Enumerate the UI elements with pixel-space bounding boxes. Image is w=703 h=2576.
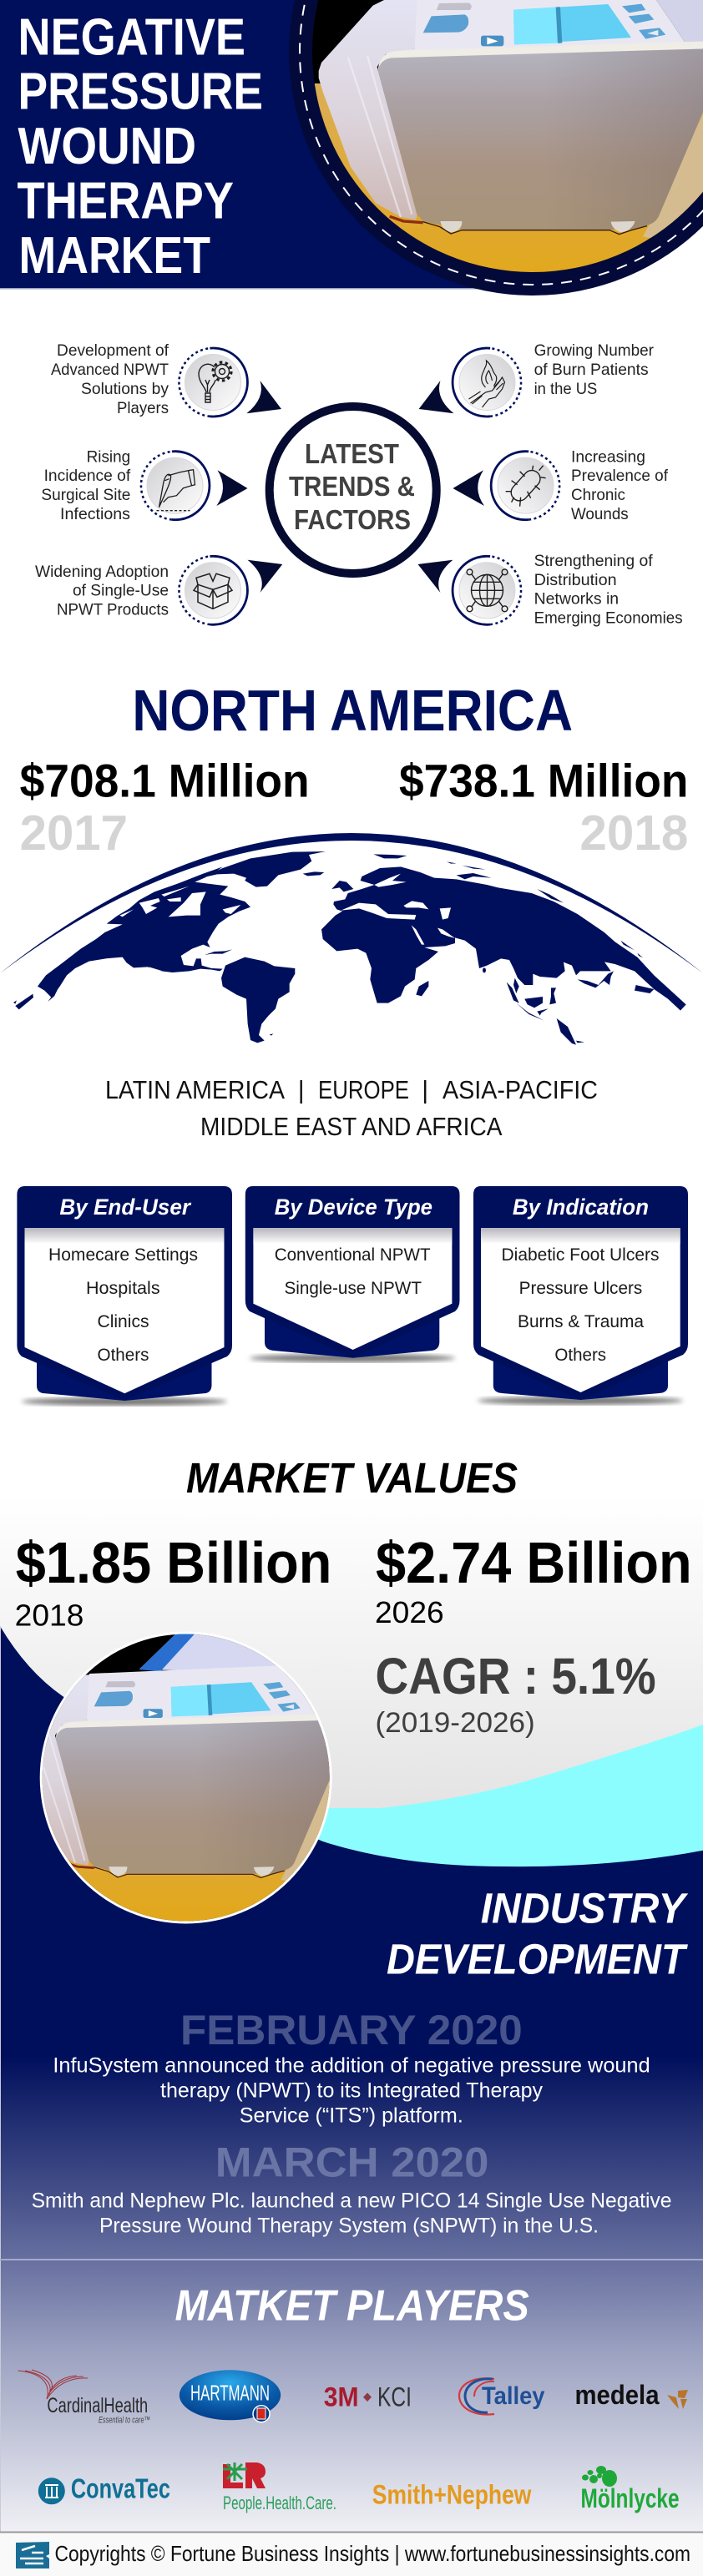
trend: burn patients: of Burn Patients <box>534 361 649 379</box>
development: february 2020 <box>53 2007 650 2128</box>
other regions: LATIN AMERICA <box>105 1075 285 1104</box>
value 2018 <box>399 755 688 861</box>
title: PRESSURE <box>18 63 263 121</box>
trend: advanced solutions: Solutions by <box>81 380 169 398</box>
trend: burn patients: in the US <box>534 380 597 398</box>
header photo badge <box>289 0 703 295</box>
heading: industry development: DEVELOPMENT <box>387 1935 688 1983</box>
value 2017: 2017 <box>20 806 128 861</box>
title: MARKET <box>18 227 210 285</box>
development: march 2020: MARCH 2020 <box>215 2139 488 2186</box>
world map <box>0 833 703 1045</box>
trend: advanced solutions: Players <box>117 399 169 417</box>
logo: hartmann <box>180 2370 281 2422</box>
heading: north america: NORTH AMERICA <box>132 678 573 743</box>
development: march 2020 <box>32 2139 672 2237</box>
panel: by end-user <box>17 1186 232 1406</box>
logo: l&t people health care <box>223 2462 336 2513</box>
panel: latest trends and factors <box>35 341 683 628</box>
trend: distribution networks: Distribution <box>534 571 617 589</box>
development: february 2020: FEBRUARY 2020 <box>180 2007 523 2053</box>
development: february 2020: Service (“ITS”) platform. <box>240 2104 463 2128</box>
development: march 2020: Pressure Wound Therapy System (sNPWT) in the U.S. <box>99 2214 599 2237</box>
trend: burn patients <box>453 341 654 417</box>
panel: by end-user: By End-User <box>59 1195 191 1220</box>
arrows toward center <box>216 381 484 593</box>
value 2018 billion <box>15 1530 331 1633</box>
development: march 2020: Smith and Nephew Plc. launched a new PICO 14 Single Use Negative <box>32 2189 672 2212</box>
trend: surgical site infections: Rising <box>87 447 130 466</box>
trend: chronic wounds: Increasing <box>571 447 645 466</box>
other regions: EUROPE <box>318 1075 409 1104</box>
panel: by indication <box>473 1186 688 1405</box>
logo: smith and nephew: Smith+Nephew <box>372 2479 531 2509</box>
value 2026 billion: 2026 <box>375 1595 444 1629</box>
trend: chronic wounds: Chronic <box>571 486 625 504</box>
center circle: TRENDS & <box>289 471 415 502</box>
value 2018 billion: $1.85 Billion <box>16 1530 331 1595</box>
panel: by device type <box>245 1186 459 1362</box>
trend: distribution networks: Networks in <box>534 590 619 609</box>
heading: market players: MATKET PLAYERS <box>175 2281 529 2330</box>
other regions <box>105 1075 598 1141</box>
title: NEGATIVE <box>18 8 245 66</box>
panel: by device type: Single-use NPWT <box>284 1279 422 1298</box>
center circle: LATEST <box>305 438 399 469</box>
panel: by indication: By Indication <box>513 1195 649 1220</box>
logo: cardinal health: CardinalHealth <box>47 2394 148 2417</box>
logo: 3m kci: KCI <box>377 2382 412 2412</box>
footer <box>0 2531 703 2576</box>
logo: cardinal health <box>18 2370 150 2426</box>
panel: by device type: Conventional NPWT <box>275 1245 431 1265</box>
trend: distribution networks: Strengthening of <box>534 552 653 570</box>
trend: chronic wounds: Wounds <box>571 505 629 523</box>
logo: talley <box>459 2378 545 2415</box>
logo: 3m kci: 3M <box>324 2382 359 2412</box>
trend: surgical site infections <box>41 447 210 523</box>
logo: 3m kci <box>324 2382 412 2412</box>
logo: convatec: ConvaTec <box>71 2473 170 2504</box>
panel: by end-user: Hospitals <box>86 1279 160 1298</box>
trend: advanced solutions: Development of <box>57 341 169 360</box>
trend: advanced solutions <box>51 341 247 417</box>
cagr: CAGR : 5.1% <box>376 1648 656 1705</box>
development: february 2020: InfuSystem announced the addition of negative pressure wound <box>53 2054 650 2078</box>
trend: chronic wounds <box>491 447 669 523</box>
panel: by indication: Burns & Trauma <box>518 1312 644 1331</box>
logo: molnlycke <box>581 2466 680 2513</box>
trend: advanced solutions: Advanced NPWT <box>51 361 169 379</box>
value 2018 billion: 2018 <box>15 1599 83 1633</box>
trend: single-use products <box>35 556 247 624</box>
trend: burn patients: Growing Number <box>534 341 654 360</box>
value 2018: $738.1 Million <box>399 755 688 807</box>
trend: surgical site infections: Infections <box>60 505 130 523</box>
center circle: FACTORS <box>294 504 411 535</box>
trend: surgical site infections: Incidence of <box>44 467 131 485</box>
other regions: ASIA-PACIFIC <box>443 1075 598 1104</box>
development: february 2020: therapy (NPWT) to its Integrated Therapy <box>160 2079 543 2103</box>
value 2018: 2018 <box>579 806 688 861</box>
trend: surgical site infections: Surgical Site <box>41 486 130 504</box>
panel: header banner <box>0 0 703 295</box>
logo: convatec <box>38 2473 170 2504</box>
other regions: MIDDLE EAST AND AFRICA <box>200 1112 503 1141</box>
panel: by end-user: Clinics <box>97 1312 149 1331</box>
heading: industry development <box>387 1885 688 1983</box>
value 2017: $708.1 Million <box>20 755 310 807</box>
panel: by indication: Others <box>554 1346 606 1365</box>
heading: market values: MARKET VALUES <box>186 1454 518 1502</box>
title: WOUND <box>18 118 196 175</box>
value 2026 billion <box>375 1530 692 1629</box>
logo: cardinal health: Essential to care™ <box>99 2416 150 2426</box>
logo: hartmann: HARTMANN <box>190 2381 270 2406</box>
cagr <box>376 1648 656 1739</box>
logo: talley: Talley <box>482 2382 545 2410</box>
panel: market values background <box>0 1494 703 2533</box>
trend: single-use products: Widening Adoption <box>35 563 169 581</box>
value 2017 <box>20 755 310 861</box>
logo: l&t people health care: People.Health.Care. <box>223 2493 336 2513</box>
trend: distribution networks <box>453 552 683 628</box>
icon: fortune business insights logo <box>16 2542 49 2568</box>
title <box>17 8 263 285</box>
panel: by end-user: Homecare Settings <box>48 1245 198 1265</box>
cagr: (2019-2026) <box>376 1707 535 1739</box>
center circle <box>270 407 437 573</box>
title: THERAPY <box>17 173 234 230</box>
heading: industry development: INDUSTRY <box>481 1885 688 1932</box>
panel: regional values <box>0 678 703 1141</box>
trend: single-use products: NPWT Products <box>57 601 169 619</box>
device photo badge <box>40 1631 332 1923</box>
panel: by device type: By Device Type <box>275 1195 432 1220</box>
panel: by indication: Pressure Ulcers <box>519 1279 642 1298</box>
trend: distribution networks: Emerging Economies <box>534 609 683 628</box>
trend: single-use products: of Single-Use <box>73 582 169 600</box>
panel: by indication: Diabetic Foot Ulcers <box>501 1245 660 1265</box>
logo: medela: medela <box>574 2380 660 2410</box>
trend: chronic wounds: Prevalence of <box>571 467 669 485</box>
panel: by end-user: Others <box>97 1346 149 1365</box>
